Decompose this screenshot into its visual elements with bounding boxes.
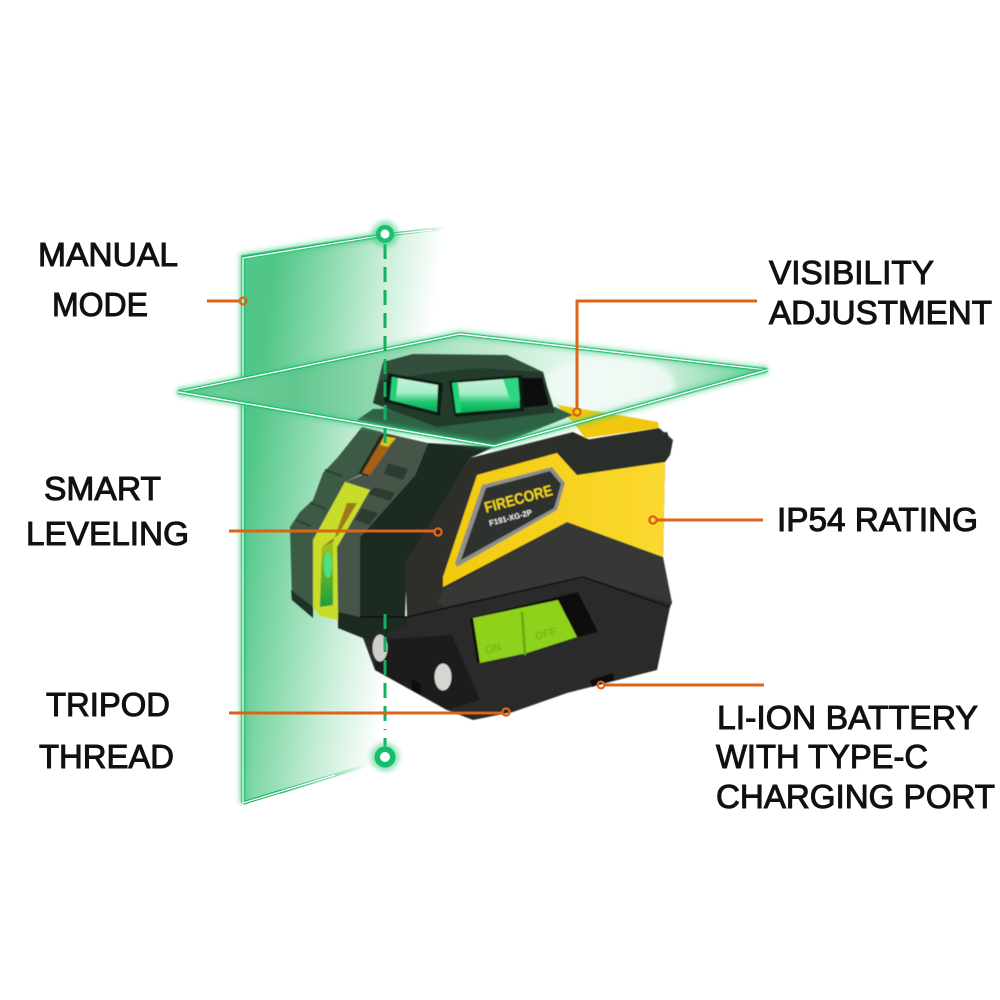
label: battery: WITH TYPE-C (716, 738, 928, 775)
callout: visibility adjustment (573, 301, 757, 416)
horizontal laser plane (178, 334, 767, 446)
callout: manual mode (207, 298, 246, 304)
brand text (483, 482, 555, 528)
callout: smart leveling (229, 528, 442, 536)
grey rubber band (337, 432, 428, 617)
green lens window (320, 542, 333, 607)
laser head (373, 354, 555, 427)
laser level device (290, 354, 673, 720)
switch recess (470, 592, 598, 663)
black rear column (360, 443, 494, 617)
side rubber panel (290, 427, 382, 617)
silver screws (372, 634, 452, 691)
label: battery: LI-ION BATTERY (717, 699, 978, 736)
seam line (360, 577, 670, 617)
power switch (473, 600, 577, 663)
top yellow strip (557, 405, 659, 438)
lime window strip (313, 482, 370, 620)
label: visibility adjustment: ADJUSTMENT (769, 294, 992, 331)
label: visibility adjustment (769, 254, 992, 331)
label: tripod thread: TRIPOD (46, 686, 170, 723)
brand text: FIRECORE (483, 482, 555, 517)
label: battery: CHARGING PORT (716, 778, 995, 815)
label: smart leveling: LEVELING (26, 515, 189, 552)
label: IP54 rating: IP54 RATING (777, 501, 978, 538)
label: manual mode: MODE (52, 286, 148, 323)
band ridges (355, 463, 408, 525)
head base plate (357, 407, 573, 447)
label: tripod thread: THREAD (39, 738, 174, 775)
top laser dot (372, 221, 398, 247)
bottom laser dot (371, 743, 399, 771)
front rubber shell (405, 432, 672, 617)
label: smart leveling: SMART (44, 470, 161, 507)
power switch: OFF (534, 626, 558, 643)
label: smart leveling (26, 470, 189, 552)
lens left (390, 377, 438, 412)
front laser edges (178, 370, 767, 446)
logo badge (455, 467, 565, 567)
callout: IP54 rating (649, 516, 763, 524)
dashed vertical laser line (384, 244, 386, 750)
lower black body (338, 577, 670, 720)
label: manual mode: MANUAL (38, 236, 178, 273)
label: tripod thread (39, 686, 174, 775)
power switch: ON (484, 641, 503, 657)
charging port (590, 673, 614, 687)
label: manual mode (38, 236, 178, 323)
upper slot (358, 434, 397, 476)
label: visibility adjustment: VISIBILITY (769, 254, 934, 291)
top bumper (557, 428, 673, 475)
yellow housing (443, 453, 665, 587)
lens right (452, 378, 520, 413)
callout: tripod thread (229, 708, 510, 716)
vertical laser plane (242, 228, 445, 803)
brand text: F191-XG-2P (488, 508, 534, 528)
callout: battery (598, 682, 764, 688)
label: battery (716, 699, 995, 815)
